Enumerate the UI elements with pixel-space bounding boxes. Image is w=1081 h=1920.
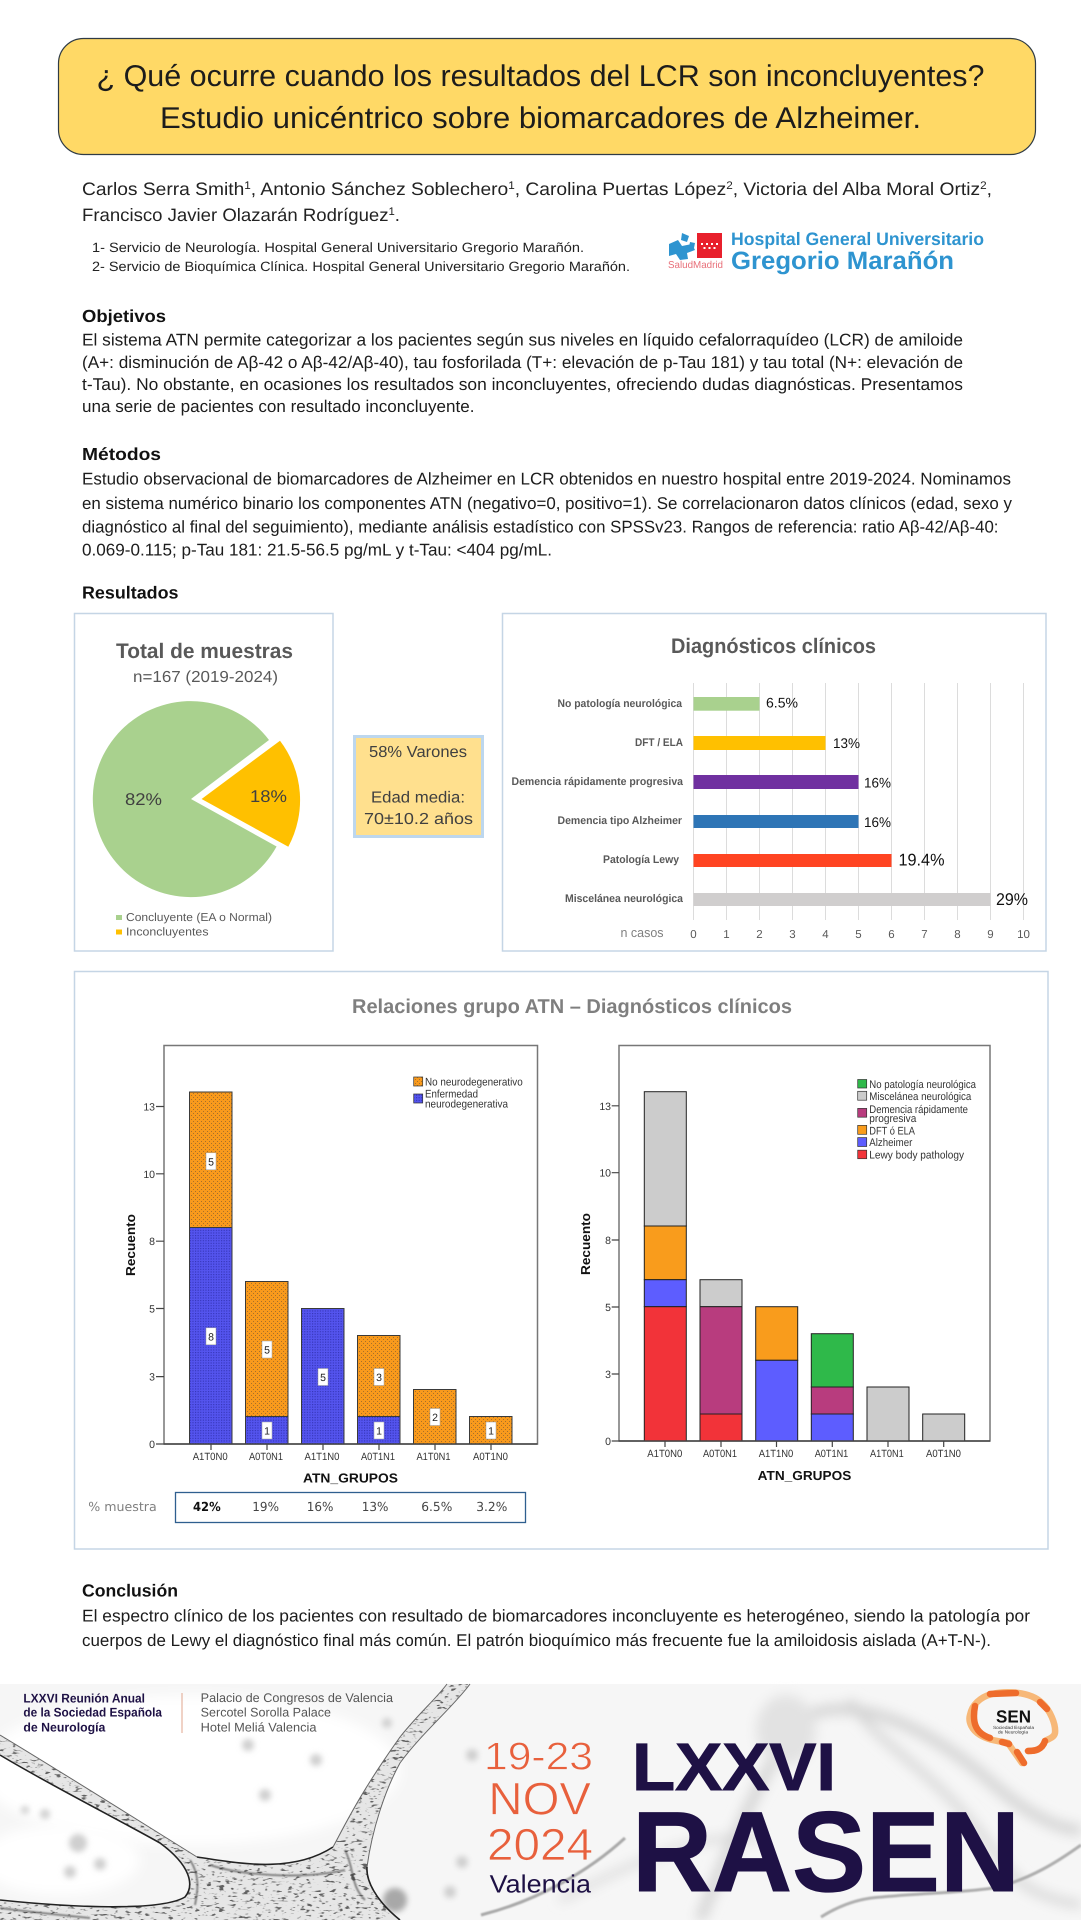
chart: clinical diagnosis stacked bars: A1T0N0: [647, 1448, 682, 1460]
chart: clinical diagnosis stacked bars: A1T1N0: [759, 1448, 793, 1460]
authors: , Victoria del Alba Moral Ortiz: [733, 179, 980, 199]
chart: neurodegenerative stacked bars: 3: [149, 1372, 155, 1384]
congress name: de la Sociedad Española: [23, 1706, 163, 1720]
venues: [201, 1691, 393, 1735]
horizontal bar chart: Demencia rápidamente progresiva: [512, 776, 684, 788]
authors: 1: [508, 180, 515, 192]
congress name: [23, 1691, 182, 1735]
section: métodos: 0.069-0.115; p-Tau 181: 21.5-56.5 pg/mL y t-Tau: <404 pg/mL.: [82, 540, 552, 560]
axis labels: 8: [954, 929, 961, 941]
dates: Valencia: [490, 1870, 591, 1898]
section: objetivos: una serie de pacientes con resultado inconcluyente.: [82, 397, 475, 416]
section: métodos: Estudio observacional de biomarcadores de Alzheimer en LCR obtenidos en nuestro hospital entre 2019-2024. Nominamos: [82, 470, 1011, 488]
axis labels: 4: [822, 929, 829, 941]
axis labels: 10: [1017, 929, 1030, 941]
legend: neurodegenerative: Enfermedad: [425, 1088, 478, 1100]
axis labels: 5: [855, 929, 862, 941]
authors: [82, 179, 992, 225]
pie legend: [116, 912, 272, 938]
callout: demographics: 70±10.2 años: [364, 811, 473, 828]
axis labels: 2: [756, 929, 763, 941]
event name: [632, 1730, 1020, 1916]
chart: neurodegenerative stacked bars: A1T1N0: [304, 1451, 340, 1463]
authors: 2: [726, 180, 733, 192]
chart: neurodegenerative stacked bars: A1T0N1: [416, 1451, 451, 1463]
horizontal bar chart: [512, 694, 1028, 909]
chart: neurodegenerative stacked bars: 0: [149, 1439, 155, 1451]
legend: diagnoses: Miscelánea neurológica: [869, 1091, 972, 1103]
authors: ,: [987, 179, 992, 199]
section: conclusión: [82, 1580, 1030, 1650]
bar value labels: 2: [432, 1412, 438, 1424]
legend: neurodegenerative: neurodegenerativa: [425, 1098, 509, 1110]
footer banner: congress: [0, 1684, 1081, 1920]
chart: clinical diagnosis stacked bars: Recuento: [578, 1213, 593, 1275]
bar value labels: 5: [208, 1156, 214, 1168]
table: % muestra: 19%: [252, 1499, 279, 1514]
section: objetivos: t-Tau). No obstante, en ocasiones los resultados son inconcluyentes, ofreciendo dudas diagnósticas. Presentamos: [82, 375, 963, 394]
panel: relaciones grupo ATN: Relaciones grupo ATN – Diagnósticos clínicos: [352, 996, 792, 1018]
venues: Palacio de Congresos de Valencia: [201, 1691, 393, 1705]
axis labels: 0: [690, 929, 697, 941]
venues: Hotel Meliá Valencia: [201, 1721, 317, 1735]
chart: neurodegenerative stacked bars: A1T0N0: [193, 1451, 228, 1463]
legend: diagnoses: [858, 1079, 977, 1162]
bar value labels: 8: [208, 1331, 214, 1343]
neuron background: [0, 1684, 1081, 1920]
bar value labels: 1: [264, 1426, 270, 1438]
pie legend: Inconcluyentes: [126, 926, 209, 938]
table: % muestra: 3.2%: [476, 1499, 507, 1514]
section: objetivos: [82, 306, 963, 416]
horizontal bar chart: 16%: [864, 814, 891, 830]
axis labels: 1: [723, 929, 730, 941]
chart: clinical diagnosis stacked bars: ATN_GRUPOS: [758, 1468, 852, 1483]
legend: diagnoses: Lewy body pathology: [869, 1150, 964, 1162]
section: métodos: Métodos: [82, 444, 161, 464]
chart: clinical diagnosis stacked bars: 13: [599, 1101, 611, 1113]
chart: clinical diagnosis stacked bars: A0T1N0: [926, 1448, 961, 1460]
horizontal bar chart: Patología Lewy: [603, 854, 680, 866]
event name: LXXVI: [632, 1730, 836, 1805]
chart: clinical diagnosis stacked bars: A0T0N1: [703, 1448, 737, 1460]
hospital logo: Gregorio Marañón: [731, 247, 954, 275]
icon: SEN brain logo: SEN: [996, 1707, 1031, 1727]
horizontal bar chart: 19.4%: [898, 850, 944, 870]
authors: Francisco Javier Olazarán Rodríguez: [82, 205, 379, 225]
horizontal bar chart: 13%: [833, 735, 860, 751]
table: % muestra: 6.5%: [421, 1499, 452, 1514]
legend: diagnoses: Demencia rápidamente: [869, 1104, 968, 1116]
panel: total de muestras: Total de muestras: [116, 640, 293, 663]
panel: total de muestras: n=167 (2019-2024): [133, 669, 278, 686]
chart: clinical diagnosis stacked bars: 3: [605, 1369, 611, 1381]
table: % muestra: [88, 1492, 526, 1522]
section: conclusión: Conclusión: [82, 1580, 178, 1600]
table: % muestra: 16%: [307, 1499, 334, 1514]
table: % muestra: 13%: [362, 1499, 389, 1514]
authors: , Carolina Puertas López: [515, 179, 726, 199]
heading: resultados: Resultados: [82, 582, 179, 602]
horizontal bar chart: 29%: [996, 890, 1028, 909]
chart: neurodegenerative stacked bars: 10: [143, 1169, 155, 1181]
title banner: [58, 38, 1036, 154]
pie chart: 82%: [125, 790, 162, 809]
chart: neurodegenerative stacked bars: A0T1N1: [361, 1451, 395, 1463]
dates: [484, 1735, 593, 1898]
chart: clinical diagnosis stacked bars: A1T0N1: [870, 1448, 904, 1460]
section: métodos: en sistema numérico binario los componentes ATN (negativo=0, positivo=1). Se correlacionaron datos clínicos (edad, sexo y: [82, 494, 1012, 513]
hospital logo: Hospital General Universitario: [731, 229, 984, 249]
bar value labels: 3: [376, 1372, 382, 1384]
dates: 2024: [487, 1819, 593, 1870]
authors: Carlos Serra Smith: [82, 179, 234, 199]
legend: neurodegenerative: [414, 1076, 523, 1110]
section: objetivos: Objetivos: [82, 306, 166, 326]
horizontal bar chart: 16%: [864, 774, 891, 790]
hospital logo: [668, 229, 984, 275]
chart: neurodegenerative stacked bars: 5: [149, 1304, 155, 1316]
icon: SEN brain logo: de Neurología: [998, 1730, 1029, 1734]
bar value labels: [206, 1153, 496, 1439]
bar value labels: 1: [488, 1426, 494, 1438]
chart: clinical diagnosis stacked bars: 0: [605, 1436, 611, 1448]
bar value labels: 1: [376, 1426, 382, 1438]
authors: 1: [244, 180, 251, 192]
affiliations: 2- Servicio de Bioquímica Clínica. Hospital General Universitario Gregorio Marañón.: [92, 259, 630, 274]
hospital logo: SaludMadrid: [668, 260, 723, 271]
horizontal bar chart: Miscelánea neurológica: [565, 893, 684, 905]
authors: .: [395, 205, 400, 225]
axis labels: [620, 925, 1030, 941]
panel: diagnósticos clínicos: [502, 614, 1046, 951]
panel: relaciones grupo ATN: [74, 972, 1048, 1549]
legend: diagnoses: No patología neurológica: [869, 1079, 977, 1091]
chart: neurodegenerative stacked bars: 8: [149, 1236, 155, 1248]
axis labels: 6: [888, 929, 895, 941]
callout: demographics: Edad media:: [371, 790, 465, 806]
title banner: Estudio unicéntrico sobre biomarcadores de Alzheimer.: [160, 102, 921, 135]
pie chart: 18%: [250, 787, 287, 806]
callout: demographics: 58% Varones: [369, 744, 467, 761]
venues: Sercotel Sorolla Palace: [201, 1706, 331, 1720]
chart: clinical diagnosis stacked bars: 10: [599, 1168, 611, 1180]
affiliations: 1- Servicio de Neurología. Hospital General Universitario Gregorio Marañón.: [92, 240, 584, 255]
horizontal bar chart: 6.5%: [766, 694, 798, 710]
chart: neurodegenerative stacked bars: A0T0N1: [249, 1451, 283, 1463]
chart: neurodegenerative stacked bars: A0T1N0: [473, 1451, 508, 1463]
panel: total de muestras: [74, 614, 333, 951]
section: conclusión: cuerpos de Lewy el diagnóstico final más común. El patrón bioquímico más frecuente fue la amiloidosis aislada (A+T-N-).: [82, 1631, 991, 1650]
authors: 1: [389, 206, 395, 218]
chart: clinical diagnosis stacked bars: [578, 1046, 990, 1483]
section: métodos: [82, 444, 1012, 560]
callout: demographics: [354, 736, 482, 836]
section: métodos: diagnóstico al final del seguimiento), mediante análisis estadístico con SPSSv23. Rangos de referencia: ratio Aβ-42/Aβ-40:: [82, 518, 998, 536]
pie legend: Concluyente (EA o Normal): [126, 912, 272, 924]
section: conclusión: El espectro clínico de los pacientes con resultado de biomarcadores inconcluyente es heterogéneo, siendo la patología por: [82, 1606, 1030, 1625]
panel: diagnósticos clínicos: Diagnósticos clínicos: [671, 635, 876, 658]
chart: clinical diagnosis stacked bars: 8: [605, 1235, 611, 1247]
authors: , Antonio Sánchez Soblechero: [251, 179, 508, 199]
icon: SEN brain logo: Sociedad Española: [993, 1725, 1035, 1730]
axis labels: 7: [921, 929, 928, 941]
congress name: de Neurología: [23, 1721, 106, 1735]
icon: SEN brain logo: [969, 1692, 1055, 1763]
legend: diagnoses: progresiva: [869, 1113, 917, 1125]
affiliations: [92, 240, 630, 274]
chart: neurodegenerative stacked bars: [123, 1046, 538, 1486]
horizontal bar chart: Demencia tipo Alzheimer: [558, 815, 683, 827]
horizontal bar chart: DFT / ELA: [635, 737, 683, 749]
section: objetivos: (A+: disminución de Aβ-42 o Aβ-42/Aβ-40), tau fosforilada (T+: elevación de p-Tau 181) y tau total (N+: elevación de: [82, 353, 963, 372]
dates: 19-23: [484, 1735, 593, 1778]
bar value labels: 5: [320, 1372, 326, 1384]
axis labels: 9: [987, 929, 994, 941]
authors: 2: [980, 180, 987, 192]
horizontal bar chart: No patología neurológica: [558, 698, 683, 710]
chart: neurodegenerative stacked bars: 13: [143, 1102, 155, 1114]
chart: clinical diagnosis stacked bars: A0T1N1: [815, 1448, 848, 1460]
axis labels: 3: [789, 929, 796, 941]
table: % muestra: 42%: [193, 1499, 221, 1514]
chart: neurodegenerative stacked bars: ATN_GRUPOS: [303, 1470, 398, 1486]
event name: RASEN: [632, 1789, 1020, 1916]
congress name: LXXVI Reunión Anual: [23, 1691, 145, 1705]
bar value labels: 5: [264, 1344, 270, 1356]
dates: NOV: [488, 1772, 591, 1824]
table: % muestra: % muestra: [88, 1499, 157, 1514]
title banner: ¿ Qué ocurre cuando los resultados del LCR son inconcluyentes?: [96, 60, 985, 93]
chart: neurodegenerative stacked bars: Recuento: [123, 1214, 138, 1276]
legend: neurodegenerative: No neurodegenerativo: [425, 1076, 523, 1088]
legend: diagnoses: Alzheimer: [869, 1137, 913, 1149]
axis labels: n casos: [620, 925, 664, 940]
pie chart: [93, 701, 300, 897]
chart: clinical diagnosis stacked bars: 5: [605, 1302, 611, 1314]
section: objetivos: El sistema ATN permite categorizar a los pacientes según sus niveles en líquido cefalorraquídeo (LCR) de amiloide: [82, 330, 963, 350]
legend: diagnoses: DFT ó ELA: [869, 1125, 916, 1137]
